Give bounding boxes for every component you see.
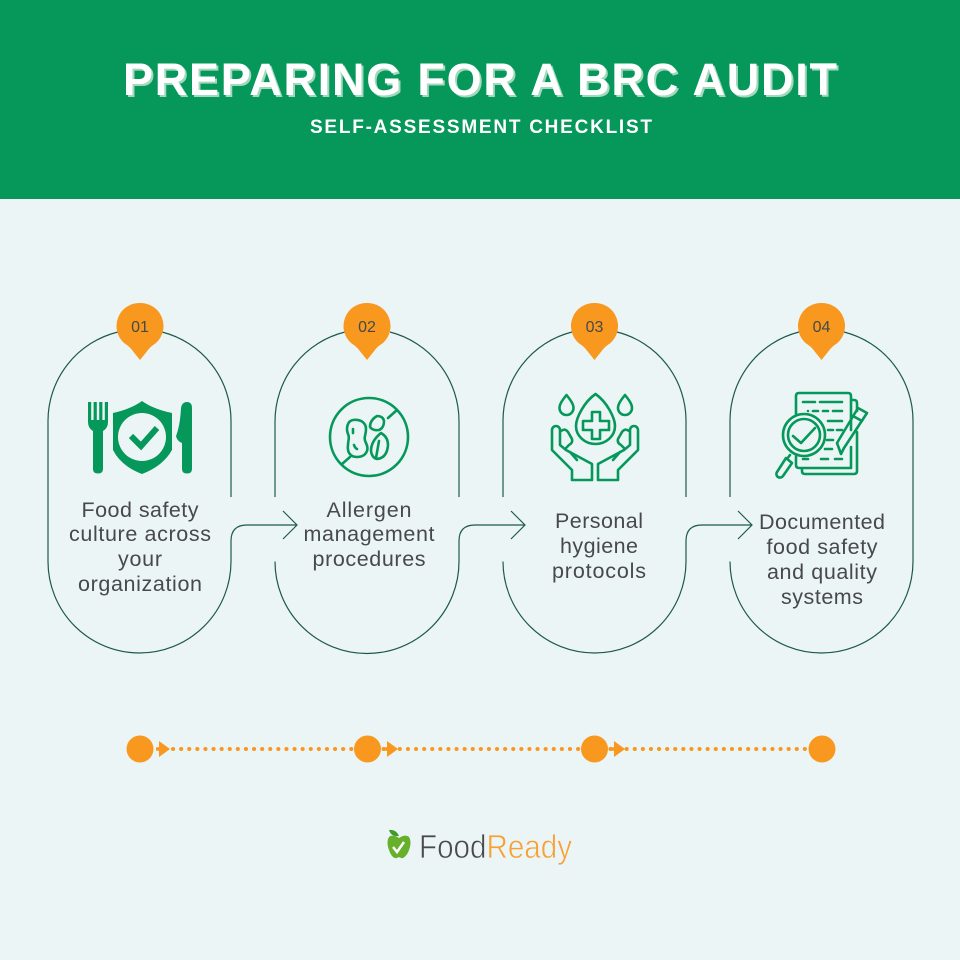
step 4 text — [759, 510, 885, 609]
FoodReady logo — [388, 828, 572, 865]
step 2 text — [304, 498, 435, 571]
step 1 text: organization — [78, 572, 202, 596]
icon: hands and droplet — [552, 394, 638, 480]
node 2 — [354, 736, 381, 762]
number pin 03 — [571, 303, 618, 360]
icon: no allergens — [330, 398, 408, 476]
dotted progress timeline — [126, 736, 836, 762]
number pin 03: 03 — [586, 319, 604, 336]
title: PREPARING FOR A BRC AUDIT — [125, 56, 839, 107]
step 2 text: procedures — [312, 547, 426, 571]
step 3 text: hygiene — [560, 534, 638, 558]
step 1 text: Food safety — [82, 498, 199, 522]
node 4 — [808, 736, 836, 762]
step 4 text: food safety — [766, 535, 878, 559]
step 2 panel — [275, 303, 525, 654]
step 3 text — [552, 509, 646, 583]
icon: fork, shield and knife — [88, 401, 192, 474]
capsule outline 2 — [275, 332, 525, 654]
step 4 text: Documented — [759, 510, 885, 534]
icon: documents and magnifier — [776, 393, 867, 478]
capsule outline 1 — [48, 332, 297, 653]
step 2 text: management — [304, 522, 435, 546]
header band — [0, 0, 960, 199]
logo wordmark: FoodReady — [419, 828, 572, 865]
node 1 — [126, 736, 154, 762]
number pin 04: 04 — [813, 319, 830, 336]
number pin 01 — [116, 303, 164, 360]
step 1 panel — [48, 303, 297, 653]
step 4 panel — [730, 303, 913, 653]
subtitle: SELF-ASSESSMENT CHECKLIST — [310, 117, 652, 138]
arrowhead 2 — [387, 741, 398, 757]
capsule outline 3 — [503, 332, 752, 653]
icon: apple with check — [388, 830, 410, 858]
step 1 text: culture across — [69, 522, 211, 546]
arrowhead 3 — [614, 741, 625, 757]
number pin 02: 02 — [358, 319, 376, 336]
step 1 text: your — [118, 547, 162, 571]
title: PREPARING FOR A BRC AUDIT — [123, 54, 837, 105]
capsule outline 4 — [730, 332, 913, 653]
number pin 04 — [798, 303, 845, 360]
step 2 text: Allergen — [326, 498, 412, 522]
number pin 01: 01 — [131, 319, 149, 336]
step 1 text — [69, 498, 211, 596]
step 3 text: Personal — [555, 509, 643, 533]
step 3 text: protocols — [552, 559, 646, 583]
node 3 — [581, 736, 608, 762]
step 3 panel — [503, 303, 752, 653]
arrowhead 1 — [159, 741, 170, 757]
number pin 02 — [343, 303, 391, 360]
step 4 text: systems — [781, 585, 863, 609]
step 4 text: and quality — [767, 560, 877, 584]
